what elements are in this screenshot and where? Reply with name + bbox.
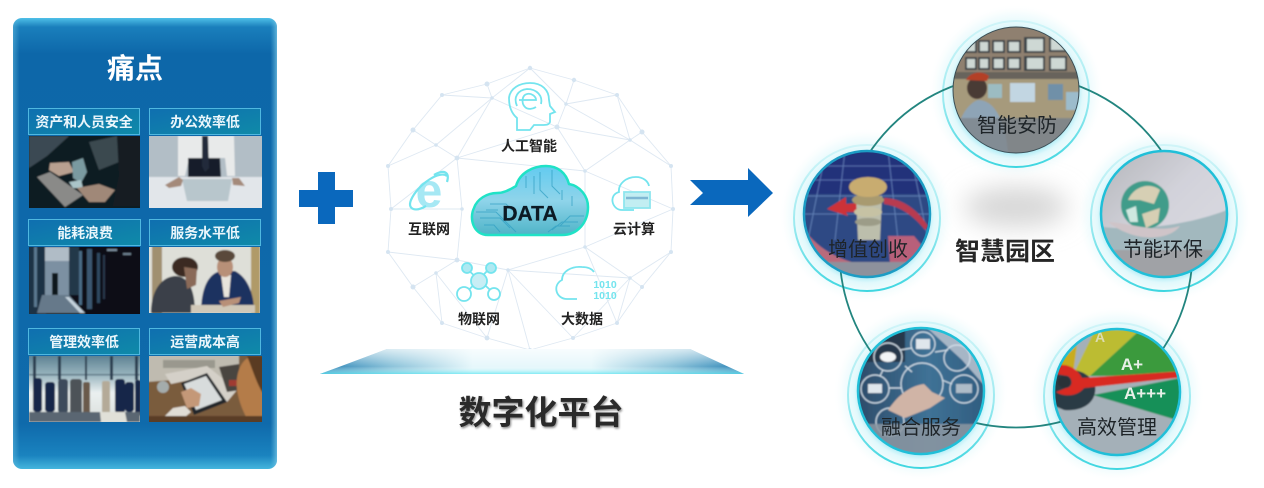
node: value creation: 增值创收 [828, 238, 908, 261]
pain point: energy waste: 能耗浪费 [57, 225, 113, 241]
icon: internet browser: e [416, 165, 442, 218]
pain point: low office efficiency [146, 108, 265, 211]
label: artificial intelligence: 人工智能 [501, 138, 557, 154]
heading: digital platform: 数字化平台 [458, 394, 624, 431]
icon: cloud computing [612, 177, 650, 210]
pain point: low management efficiency: 管理效率低 [49, 334, 119, 350]
heading: pain points: 痛点 [107, 53, 163, 84]
node: efficient management [1052, 328, 1182, 456]
pain point: low service level [146, 220, 263, 316]
arrow [690, 168, 773, 217]
node: smart security [950, 25, 1082, 158]
icon: big data [556, 267, 617, 302]
node: energy saving [1098, 148, 1232, 280]
node: efficient management: A+++ [1124, 384, 1166, 403]
node: integrated services [855, 326, 990, 460]
pain point: energy waste [26, 220, 143, 317]
sphere network [386, 66, 675, 352]
centre shadow [964, 187, 1068, 227]
icon: AI head [509, 83, 555, 130]
node: smart security: 智能安防 [977, 114, 1057, 137]
label: cloud computing: 云计算 [613, 221, 655, 237]
icon: data cloud [472, 166, 588, 235]
node: energy saving: 节能环保 [1123, 238, 1203, 261]
panel: pain points [13, 18, 277, 469]
pain point: high operating cost: 运营成本高 [170, 334, 240, 350]
node: efficient management: A+ [1121, 355, 1143, 374]
pain point: low office efficiency: 办公效率低 [170, 114, 240, 130]
label: big data: 大数据 [561, 311, 603, 327]
node: efficient management: 高效管理 [1077, 416, 1157, 439]
label: internet of things: 物联网 [458, 311, 500, 327]
pain point: low service level: 服务水平低 [170, 225, 240, 241]
icon: big data: 1010 [593, 290, 617, 302]
pain point: asset and personnel safety [26, 108, 143, 211]
plus sign [299, 172, 353, 224]
icon: big data: 1010 [593, 279, 617, 291]
node: value creation [800, 148, 934, 282]
node: efficient management: A [1095, 329, 1105, 345]
label: DATA: DATA [502, 202, 558, 226]
pain point: asset and personnel safety: 资产和人员安全 [35, 114, 133, 130]
connecting ring [840, 74, 1192, 428]
heading: smart park: 智慧园区 [955, 238, 1055, 266]
node halos [779, 4, 1252, 482]
pain point: low management efficiency [26, 328, 143, 425]
platform [320, 349, 744, 374]
node: integrated services: 融合服务 [881, 416, 961, 439]
label: internet: 互联网 [408, 221, 450, 237]
pain point: high operating cost [146, 328, 265, 425]
icon: internet of things [457, 263, 500, 301]
